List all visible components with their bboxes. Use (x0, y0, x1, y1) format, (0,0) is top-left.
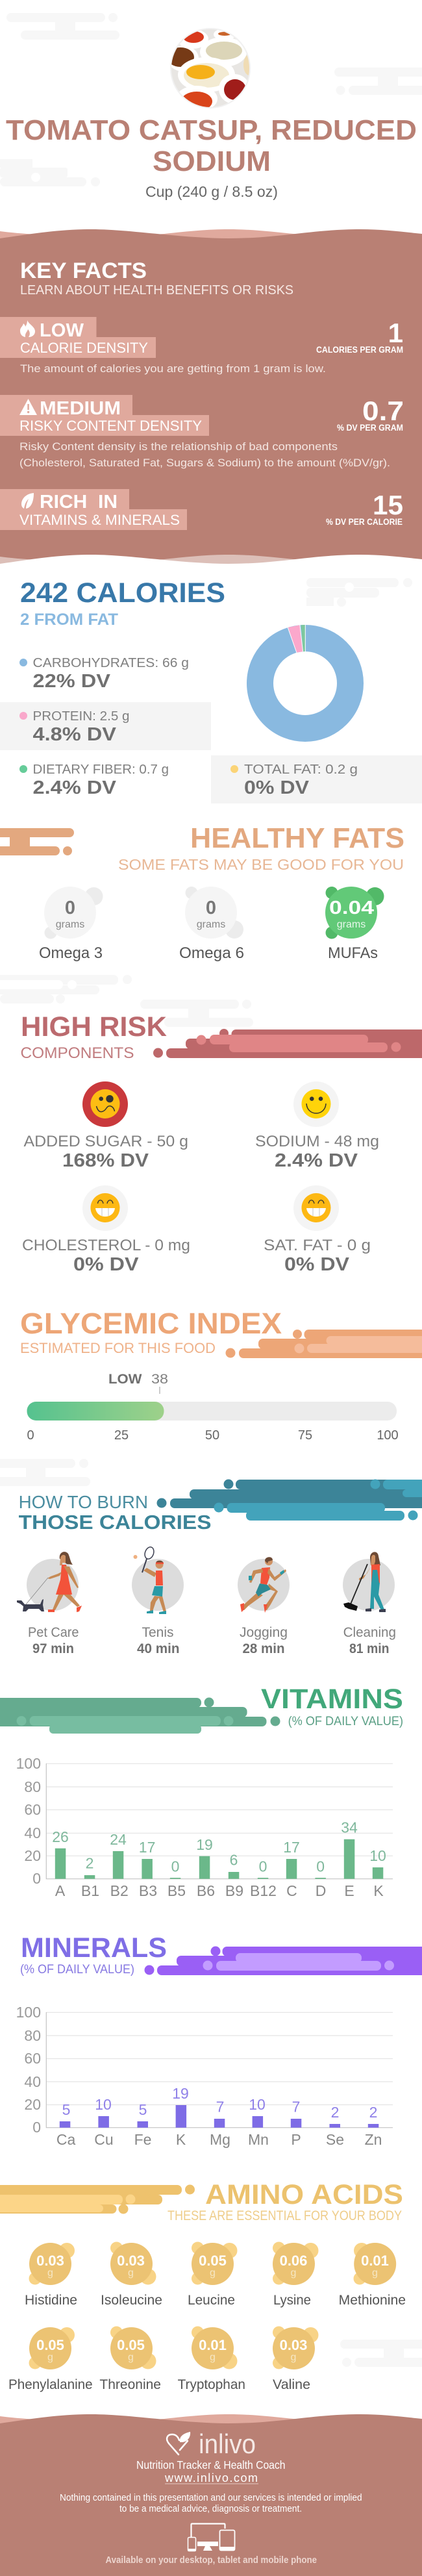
panel: how to burn (0, 1459, 422, 1656)
heading: minerals: MINERALS (21, 1932, 167, 1964)
background clouds: high risk (0, 975, 253, 1027)
panel: high risk components (21, 1011, 422, 1275)
bar chart: minerals (16, 2004, 393, 2148)
amino: phenylalanine: 0.05 (36, 2337, 64, 2353)
bar chart: vitamins: 24 (110, 1831, 127, 1848)
heading: how to burn those calories: HOW TO BURN (19, 1492, 148, 1512)
amino: isoleucine: Isoleucine (101, 2293, 162, 2308)
title: TOMATO CATSUP, REDUCED (6, 114, 417, 146)
amino: threonine: Threonine (99, 2377, 161, 2392)
bar chart: vitamins: C (286, 1882, 297, 1899)
amino: valine: Valine (273, 2377, 310, 2392)
heading: minerals: (% OF DAILY VALUE) (20, 1963, 134, 1976)
icon: jogger (240, 1557, 286, 1613)
amino: valine: 0.03 (280, 2337, 307, 2353)
activity: cleaning: Cleaning (343, 1625, 396, 1640)
item: cholesterol: CHOLESTEROL - 0 mg (22, 1237, 190, 1254)
icon: person sweeping (343, 1552, 386, 1612)
heading: key facts (20, 259, 293, 297)
fact: medium risky content density: % DV PER GRAM (337, 423, 403, 433)
amino: threonine: 0.05 (117, 2337, 145, 2353)
panel: minerals (16, 1932, 422, 2148)
heading: calories (20, 577, 225, 629)
stat: omega 3: grams (56, 919, 84, 930)
food photo (170, 28, 251, 108)
gauge value (108, 1372, 168, 1394)
bar chart: minerals: 40 (24, 2073, 41, 2090)
heading: high risk: HIGH RISK (21, 1011, 167, 1042)
bar chart: vitamins: B2 (110, 1882, 129, 1899)
fact: medium risky content density: Risky Content density is the relationship of bad components (19, 440, 338, 453)
fact: low calorie density (0, 317, 403, 375)
icon: tennis player (134, 1546, 166, 1614)
bar chart: minerals: 10 (95, 2096, 112, 2113)
stat: omega 6: 0 (206, 898, 216, 918)
amino: histidine: Histidine (25, 2293, 77, 2308)
fact: rich in vitamins and minerals: 15 (373, 490, 403, 520)
legend: carbohydrates: 22% DV (32, 671, 111, 692)
icon: smiling face (301, 1089, 331, 1118)
fact: medium risky content density (0, 395, 404, 469)
bar chart: vitamins: 10 (369, 1847, 386, 1864)
panel: footer (0, 2414, 422, 2576)
amino: isoleucine: g (128, 2267, 134, 2279)
footer text: Nothing contained in this presentation and our services is intended or implied (60, 2492, 362, 2503)
fact: low calorie density: 1 (388, 318, 403, 348)
bar chart: minerals: 2 (331, 2104, 339, 2121)
bar chart: minerals: 19 (172, 2085, 189, 2102)
bar chart: minerals: 10 (249, 2096, 266, 2113)
gauge value: LOW (108, 1372, 142, 1387)
bar chart: vitamins: 0 (259, 1858, 267, 1875)
bar chart: minerals: Se (326, 2131, 344, 2148)
bar chart: minerals: Cu (94, 2131, 114, 2148)
bar chart: vitamins: E (344, 1882, 354, 1899)
bar chart: minerals: Ca (56, 2131, 76, 2148)
item: saturated fat: SAT. FAT - 0 g (264, 1237, 371, 1254)
bar chart: vitamins: 20 (24, 1847, 41, 1864)
bar chart: minerals: 5 (62, 2101, 70, 2118)
background cloud (0, 1459, 90, 1486)
bar chart: minerals: 0 (32, 2119, 41, 2136)
heading: high risk (21, 1011, 167, 1062)
title: SODIUM (153, 145, 271, 177)
heading: vitamins: VITAMINS (261, 1684, 403, 1715)
amino: tryptophan: 0.01 (199, 2337, 227, 2353)
bar chart: minerals: P (291, 2131, 301, 2148)
item: sodium: SODIUM - 48 mg (255, 1133, 379, 1150)
heading: amino acids (168, 2179, 403, 2223)
activity: cleaning: 81 min (349, 1641, 390, 1656)
bar chart: vitamins: 0 (32, 1870, 41, 1887)
panel: glycemic index (20, 1307, 422, 1443)
background cloud (340, 2340, 422, 2367)
fact: medium risky content density: RISKY CONTENT DENSITY (19, 418, 202, 434)
heading: high risk: COMPONENTS (21, 1044, 134, 1062)
stat: omega 3: Omega 3 (39, 944, 103, 962)
bar chart: vitamins: K (373, 1882, 384, 1899)
stat: MUFAs: grams (337, 919, 366, 930)
amino: lysine: Lysine (273, 2293, 311, 2308)
bar chart: vitamins: A (55, 1882, 66, 1899)
bar chart: vitamins: 6 (230, 1852, 238, 1869)
gauge axis labels: 0 (27, 1428, 34, 1443)
heading: glycemic index: ESTIMATED FOR THIS FOOD (20, 1340, 216, 1356)
icon: grinning face (91, 1193, 119, 1222)
item: saturated fat: 0% DV (284, 1254, 350, 1275)
decorative banner (0, 2185, 195, 2214)
amino: isoleucine: 0.03 (117, 2253, 145, 2269)
bar chart: vitamins: 26 (52, 1828, 69, 1845)
fact: medium risky content density: MEDIUM (40, 398, 121, 419)
icon: woman walking a dog (17, 1552, 82, 1612)
fact: medium risky content density: 0.7 (362, 396, 404, 426)
fact: rich in vitamins and minerals: VITAMINS & MINERALS (19, 512, 180, 528)
amino: isoleucine (101, 2242, 162, 2308)
decorative banner (0, 1698, 280, 1734)
activity: jogging: 28 min (243, 1641, 284, 1656)
logo: inlivo (167, 2429, 256, 2459)
fact: low calorie density: CALORIE DENSITY (20, 340, 148, 356)
bar chart: vitamins: D (316, 1882, 326, 1899)
legend: carbohydrates: CARBOHYDRATES: 66 g (32, 656, 189, 670)
fact: rich in vitamins and minerals: RICH IN (40, 492, 118, 512)
heading: healthy fats: HEALTHY FATS (190, 822, 404, 854)
amino: leucine: g (210, 2267, 216, 2279)
gauge axis labels: 25 (114, 1428, 129, 1443)
stat: omega 6: Omega 6 (179, 944, 244, 962)
activity: cleaning (343, 1552, 396, 1656)
title (6, 114, 417, 177)
legend background rows (0, 702, 422, 803)
legend: dietary fiber (19, 763, 169, 798)
activity: tennis: Tenis (142, 1625, 174, 1640)
bar chart: minerals: 5 (139, 2101, 147, 2118)
serving size: Cup (240 g / 8.5 oz) (145, 183, 278, 200)
legend: total fat: 0% DV (244, 777, 310, 798)
fact: low calorie density: LOW (40, 320, 84, 341)
bar chart: vitamins: 60 (24, 1801, 41, 1818)
bar chart: minerals: 60 (24, 2050, 41, 2067)
bar chart: vitamins: 17 (283, 1839, 300, 1856)
heading: amino acids: AMINO ACIDS (205, 2179, 403, 2210)
background clouds: header (0, 13, 422, 186)
activity: tennis (132, 1546, 184, 1656)
footer text: www.inlivo.com (164, 2471, 258, 2484)
bar chart: vitamins: 34 (341, 1819, 358, 1836)
item: sodium: 2.4% DV (275, 1150, 358, 1171)
fact: medium risky content density: (Cholesterol, Saturated Fat, Sugars & Sodium) to the amount (%DV/gr). (19, 457, 390, 469)
bar chart: vitamins: B3 (139, 1882, 157, 1899)
icon: leaf (21, 493, 34, 509)
panel: healthy fats (0, 822, 404, 962)
stat: omega 3 (39, 887, 103, 962)
amino: histidine: g (47, 2267, 53, 2279)
legend: total fat (230, 763, 358, 798)
heading: vitamins (261, 1684, 403, 1728)
bar chart: vitamins: 0 (316, 1858, 325, 1875)
activity: pet care: 97 min (32, 1641, 74, 1656)
amino: methionine: 0.01 (361, 2253, 389, 2269)
gauge value: 38 (151, 1372, 168, 1387)
donut chart (260, 625, 351, 729)
stat: MUFAs: MUFAs (328, 944, 378, 962)
amino: histidine: 0.03 (36, 2253, 64, 2269)
gauge axis labels: 50 (205, 1428, 219, 1443)
heading: key facts: LEARN ABOUT HEALTH BENEFITS OR RISKS (20, 283, 293, 297)
amino: threonine: g (128, 2352, 134, 2363)
bar chart: vitamins: B1 (81, 1882, 99, 1899)
activity: tennis: 40 min (137, 1641, 179, 1656)
decorative banner (144, 1946, 422, 1975)
stat: MUFAs: 0.04 (329, 898, 374, 918)
decorative banner (0, 828, 74, 855)
heading: how to burn those calories (19, 1492, 211, 1534)
legend: protein (19, 709, 130, 745)
bar chart: vitamins: 2 (86, 1855, 93, 1872)
icon: flame (20, 320, 35, 337)
footer text (60, 2458, 362, 2514)
amino: valine: g (291, 2352, 296, 2363)
amino: histidine (25, 2243, 77, 2308)
amino: phenylalanine: g (47, 2352, 53, 2363)
item: added sugar: 168% DV (62, 1150, 149, 1171)
amino: phenylalanine: Phenylalanine (8, 2377, 93, 2392)
stat: MUFAs (325, 887, 384, 962)
item: cholesterol: 0% DV (73, 1254, 139, 1275)
bar chart: vitamins: 40 (24, 1825, 41, 1841)
item: added sugar: ADDED SUGAR - 50 g (23, 1133, 188, 1150)
legend: protein: PROTEIN: 2.5 g (32, 709, 130, 724)
panel: calories (0, 577, 422, 803)
item: sodium (255, 1081, 379, 1171)
amino: tryptophan (178, 2327, 245, 2392)
icon: worried face (91, 1089, 119, 1118)
stat: omega 3: 0 (65, 898, 75, 918)
stat: omega 6 (179, 887, 244, 962)
availability note: Available on your desktop, tablet and mobile phone (105, 2555, 317, 2566)
heading: key facts: KEY FACTS (20, 259, 147, 283)
item: cholesterol (22, 1185, 190, 1275)
amino: threonine (99, 2327, 161, 2392)
amino: leucine (188, 2242, 238, 2308)
amino: tryptophan: g (210, 2352, 216, 2363)
amino: leucine: Leucine (188, 2293, 235, 2308)
heading: vitamins: (% OF DAILY VALUE) (288, 1715, 403, 1728)
gauge bar (27, 1402, 397, 1421)
gauge axis labels: 75 (298, 1428, 312, 1443)
decorative banner (226, 1330, 422, 1358)
bar chart: minerals: 100 (16, 2004, 41, 2021)
bar chart: vitamins: B12 (250, 1882, 277, 1899)
amino: lysine: 0.06 (280, 2253, 307, 2269)
decorative banner (153, 1029, 422, 1058)
heading: healthy fats: SOME FATS MAY BE GOOD FOR YOU (118, 856, 404, 873)
activity: pet care (17, 1552, 82, 1656)
gauge axis labels (27, 1428, 399, 1443)
activity: jogging (238, 1557, 290, 1656)
background cloud (306, 578, 412, 607)
heading: glycemic index (20, 1307, 282, 1356)
bar chart: minerals: 20 (24, 2096, 41, 2113)
panel: amino acids (0, 2179, 422, 2392)
bar chart: vitamins: 17 (139, 1839, 155, 1856)
bar chart: minerals: 7 (292, 2099, 300, 2115)
legend: dietary fiber: 2.4% DV (32, 777, 117, 798)
heading: how to burn those calories: THOSE CALORIES (19, 1511, 211, 1534)
bar chart: vitamins: 19 (196, 1836, 213, 1853)
bar chart: vitamins: B5 (168, 1882, 186, 1899)
item: added sugar (23, 1081, 188, 1171)
bar chart: vitamins (16, 1755, 393, 1899)
decorative banner (157, 1480, 422, 1521)
heading: calories: 242 CALORIES (20, 577, 225, 609)
bar chart: minerals: K (176, 2131, 186, 2148)
footer text: to be a medical advice, diagnosis or treatment. (119, 2503, 302, 2514)
amino: methionine: Methionine (339, 2293, 406, 2308)
legend: carbohydrates (19, 656, 189, 692)
bar chart: minerals: Zn (365, 2131, 382, 2148)
amino: valine (273, 2327, 318, 2392)
amino: leucine: 0.05 (199, 2253, 227, 2269)
bar chart: vitamins: 0 (171, 1858, 179, 1875)
bar chart: vitamins: B6 (197, 1882, 215, 1899)
activity: jogging: Jogging (240, 1625, 288, 1640)
bar chart: vitamins: 80 (24, 1778, 41, 1795)
heading: glycemic index: GLYCEMIC INDEX (20, 1307, 282, 1340)
activity: pet care: Pet Care (28, 1625, 79, 1640)
heading: healthy fats (118, 822, 404, 873)
logo: inlivo: inlivo (199, 2429, 256, 2459)
icon: warning triangle (19, 399, 37, 415)
bar chart: minerals: Mn (248, 2131, 269, 2148)
amino: methionine (339, 2243, 406, 2308)
amino: methionine: g (372, 2267, 378, 2279)
stat: omega 6: grams (197, 919, 225, 930)
bar chart: minerals: Mg (210, 2131, 230, 2148)
bar chart: minerals: 2 (369, 2104, 377, 2121)
bar chart: minerals: 7 (216, 2099, 224, 2115)
icon: devices (188, 2524, 235, 2551)
item: saturated fat (264, 1185, 371, 1275)
amino: phenylalanine (8, 2327, 93, 2392)
gauge axis labels: 100 (377, 1428, 399, 1443)
legend: protein: 4.8% DV (32, 724, 117, 745)
bar chart: vitamins: 100 (16, 1755, 41, 1772)
heading: calories: 2 FROM FAT (20, 611, 118, 629)
icon: grinning face (301, 1193, 331, 1222)
legend: total fat: TOTAL FAT: 0.2 g (244, 763, 358, 777)
amino: lysine (273, 2242, 318, 2308)
bar chart: minerals: Fe (134, 2131, 151, 2148)
bar chart: vitamins: B9 (225, 1882, 243, 1899)
amino: lysine: g (291, 2267, 296, 2279)
panel: key facts (0, 229, 422, 572)
fact: rich in vitamins and minerals: % DV PER CALORIE (326, 517, 403, 527)
amino: tryptophan: Tryptophan (178, 2377, 245, 2392)
fact: low calorie density: The amount of calories you are getting from 1 gram is low. (20, 362, 326, 375)
fact: low calorie density: CALORIES PER GRAM (316, 345, 403, 355)
bar chart: minerals: 80 (24, 2027, 41, 2044)
legend: dietary fiber: DIETARY FIBER: 0.7 g (32, 763, 169, 777)
fact: rich in vitamins and minerals (0, 489, 403, 530)
panel: vitamins (0, 1684, 403, 1899)
footer text: Nutrition Tracker & Health Coach (136, 2458, 286, 2471)
